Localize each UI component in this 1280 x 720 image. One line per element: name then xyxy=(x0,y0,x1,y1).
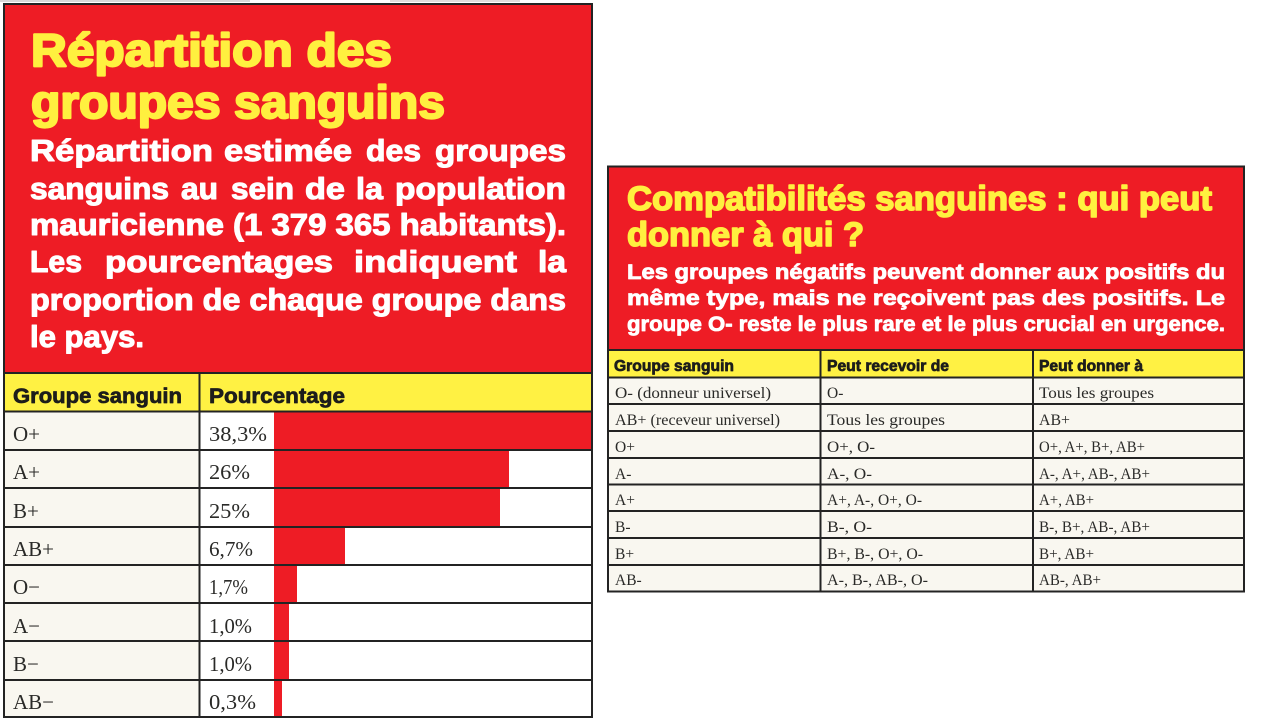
column: can receive from xyxy=(827,385,945,589)
column: blood group: O- (donneur universel) xyxy=(615,385,771,402)
table header: Groupe sanguin xyxy=(13,385,182,408)
column: can donate to xyxy=(1039,385,1154,589)
description text: groupe O- reste le plus rare et le plus crucial en urgence. xyxy=(627,313,1225,336)
blood group column xyxy=(3,411,199,718)
percentage values xyxy=(209,422,267,714)
blood group column: A− xyxy=(13,614,40,638)
percentage values: 0,3% xyxy=(209,690,256,714)
table header xyxy=(3,373,593,411)
column: can receive from: Tous les groupes xyxy=(827,412,945,429)
description text: la xyxy=(356,171,384,206)
column: blood group: A+ xyxy=(615,492,635,509)
column: can donate to: B-, B+, AB-, AB+ xyxy=(1039,519,1150,536)
column: blood group: B+ xyxy=(615,546,634,563)
description text: de xyxy=(305,171,345,206)
panel: blood group distribution xyxy=(3,3,593,718)
column: can donate to: AB+ xyxy=(1039,412,1070,429)
description text: population xyxy=(395,171,566,206)
column: can receive from: B-, O- xyxy=(827,519,872,536)
panel background xyxy=(608,166,1245,592)
panel background xyxy=(3,3,593,718)
title: donner à qui ? xyxy=(627,216,864,254)
blood group column: B+ xyxy=(13,499,39,523)
description text: sanguins xyxy=(30,171,169,206)
blood group column: A+ xyxy=(13,460,40,484)
description text: le pays. xyxy=(30,319,144,354)
column: blood group: AB- xyxy=(615,572,642,589)
column: can receive from: A+, A-, O+, O- xyxy=(827,492,922,509)
column: blood group: B- xyxy=(615,519,630,536)
description text: des xyxy=(366,133,421,168)
percentage values: 6,7% xyxy=(209,537,253,561)
description text: mauricienne (1 379 365 habitants). xyxy=(30,207,566,242)
description text: sein xyxy=(231,171,294,206)
column: can donate to: AB-, AB+ xyxy=(1039,572,1101,589)
red header block xyxy=(608,166,1245,350)
blood group column: O+ xyxy=(13,422,40,446)
percentage values: 1,0% xyxy=(209,652,252,676)
column: can receive from: O+, O- xyxy=(827,439,875,456)
column: can receive from: A-, B-, AB-, O- xyxy=(827,572,928,589)
description text xyxy=(627,261,1225,336)
description text: Les groupes négatifs peuvent donner aux positifs du xyxy=(627,261,1225,284)
description text: proportion de chaque groupe dans xyxy=(30,282,566,317)
description text: indiquent xyxy=(354,244,517,279)
description text: même type, mais ne reçoivent pas des positifs. Le xyxy=(627,287,1225,310)
title xyxy=(31,24,445,128)
table header: Peut recevoir de xyxy=(827,358,949,375)
title: groupes sanguins xyxy=(31,76,445,128)
column: can donate to: A+, AB+ xyxy=(1039,492,1094,509)
description text: Répartition xyxy=(30,133,213,168)
percentage values: 38,3% xyxy=(209,422,267,446)
blood group column: AB+ xyxy=(13,537,54,561)
description text: estimée xyxy=(224,133,352,168)
column: can donate to: A-, A+, AB-, AB+ xyxy=(1039,466,1150,483)
description text: Les xyxy=(30,244,82,279)
column: blood group: A- xyxy=(615,466,631,483)
description text: au xyxy=(181,171,218,206)
percentage values: 1,0% xyxy=(209,614,252,638)
column: can receive from: A-, O- xyxy=(827,466,872,483)
table header: Groupe sanguin xyxy=(614,358,734,375)
percentage values: 26% xyxy=(209,460,250,484)
blood group column: B− xyxy=(13,652,39,676)
title: Compatibilités sanguines : qui peut xyxy=(627,180,1212,218)
description text xyxy=(30,133,567,354)
title xyxy=(627,180,1212,254)
panel: blood compatibility xyxy=(608,166,1245,592)
percentage values: 1,7% xyxy=(209,575,248,599)
column: can receive from: O- xyxy=(827,385,843,402)
column: blood group: AB+ (receveur universel) xyxy=(615,412,780,429)
column: can receive from: B+, B-, O+, O- xyxy=(827,546,923,563)
blood group column: O− xyxy=(13,575,40,599)
description text: pourcentages xyxy=(105,244,333,279)
title: Répartition des xyxy=(31,24,392,76)
description text: la xyxy=(538,244,567,279)
table header: Peut donner à xyxy=(1039,358,1143,375)
bar chart xyxy=(274,411,593,718)
table header xyxy=(608,350,1245,377)
table header: Pourcentage xyxy=(209,385,345,408)
blood group column: AB− xyxy=(13,690,54,714)
column: can donate to: Tous les groupes xyxy=(1039,385,1154,402)
percentage values: 25% xyxy=(209,499,250,523)
column: can donate to: B+, AB+ xyxy=(1039,546,1094,563)
column: blood group: O+ xyxy=(615,439,635,456)
description text: groupes xyxy=(435,133,566,168)
column: blood group xyxy=(615,385,780,589)
red header block xyxy=(3,3,593,373)
column: can donate to: O+, A+, B+, AB+ xyxy=(1039,439,1145,456)
